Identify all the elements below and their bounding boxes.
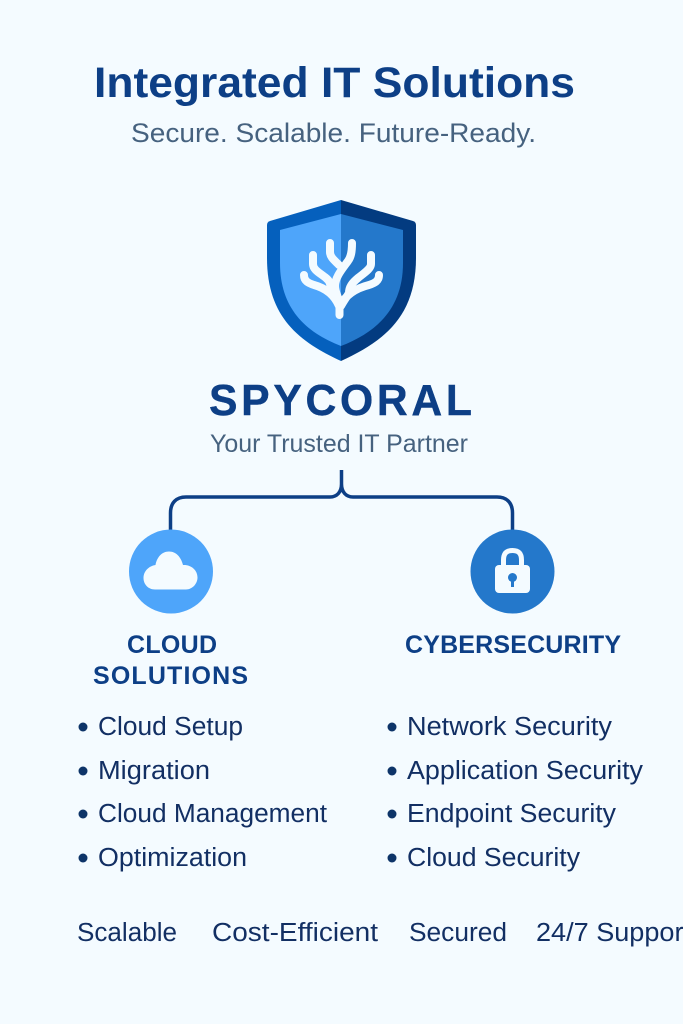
subtitle: Secure. Scalable. Future-Ready. [131, 118, 536, 148]
benefits row: Cost-Efficient [212, 919, 378, 947]
list: cybersecurity: Application Security [407, 757, 643, 785]
list: cybersecurity: Network Security [407, 713, 612, 741]
icon: padlock [470, 530, 554, 614]
heading: cloud solutions: SOLUTIONS [93, 662, 248, 690]
benefits row: Secured [409, 919, 507, 947]
heading: cloud solutions [93, 631, 248, 690]
benefits row: Scalable [77, 919, 177, 947]
list: cybersecurity [388, 713, 643, 872]
icon: shield with coral [267, 200, 416, 361]
list: cloud solutions: Migration [98, 757, 210, 785]
list: cloud solutions: Cloud Setup [98, 713, 243, 741]
list: cloud solutions: Cloud Management [98, 800, 327, 828]
connector bracket [170, 470, 512, 531]
list: cloud solutions: Optimization [98, 844, 247, 872]
brand name: SPYCORAL [209, 376, 472, 425]
heading: cloud solutions: CLOUD [127, 631, 217, 659]
benefits row [77, 919, 683, 947]
tagline: Your Trusted IT Partner [210, 430, 468, 458]
list: cloud solutions [78, 713, 327, 872]
heading: cybersecurity: CYBERSECURITY [405, 631, 621, 659]
title: Integrated IT Solutions [94, 59, 575, 107]
icon: cloud [129, 530, 213, 614]
list: cybersecurity: Cloud Security [407, 844, 580, 872]
list: cybersecurity: Endpoint Security [407, 800, 616, 828]
benefits row: 24/7 Support [536, 919, 683, 947]
